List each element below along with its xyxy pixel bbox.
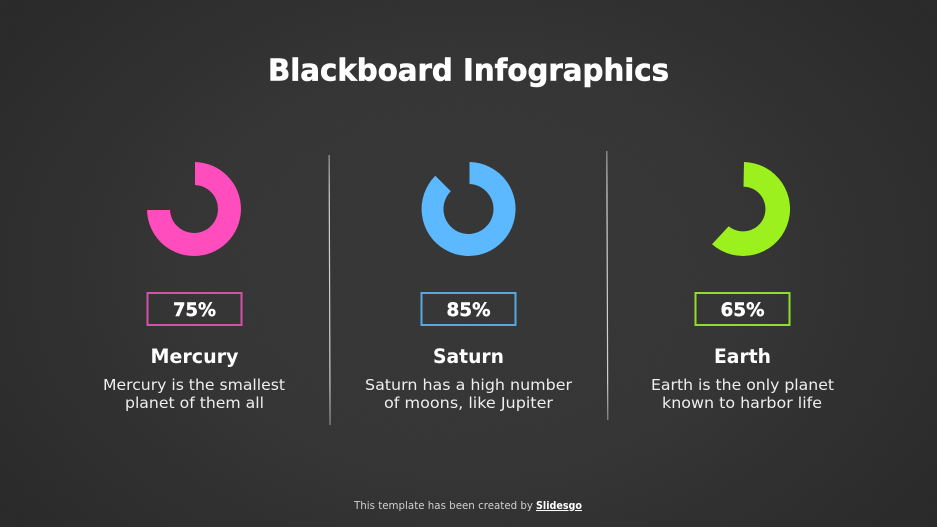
percent box: Saturn (422, 293, 516, 325)
description: Mercury: planet of them all (125, 394, 264, 412)
percent box: Earth (696, 293, 790, 325)
description: Earth: Earth is the only planet (651, 376, 834, 394)
description: Earth: known to harbor life (662, 394, 822, 412)
description: Mercury: Mercury is the smallest (103, 376, 285, 394)
heading: Earth: Earth (714, 345, 771, 368)
heading: Saturn: Saturn (433, 345, 504, 368)
description: Saturn: Saturn has a high number (365, 376, 573, 394)
description: Saturn: of moons, like Jupiter (384, 394, 554, 412)
percent box: Mercury (148, 293, 242, 325)
donut chart: Earth 65% (712, 162, 790, 256)
footer credit: This template has been created by (353, 500, 533, 512)
percent box: Mercury: 75% (173, 299, 216, 321)
title: Blackboard Infographics (268, 54, 669, 88)
description: Saturn (365, 376, 573, 412)
heading: Mercury: Mercury (150, 345, 239, 368)
panel: Mercury (103, 162, 285, 412)
divider: left (329, 155, 331, 425)
divider: right (606, 151, 608, 420)
footer credit: Slidesgo (536, 500, 582, 512)
panel: Saturn (365, 162, 573, 412)
percent box: Saturn: 85% (446, 299, 490, 321)
description: Mercury (103, 376, 285, 412)
donut chart: Mercury 75% (147, 162, 241, 256)
description: Earth (651, 376, 834, 412)
donut chart: Saturn 85% (422, 162, 516, 256)
percent box: Earth: 65% (720, 299, 764, 321)
panel: Earth (651, 162, 834, 412)
